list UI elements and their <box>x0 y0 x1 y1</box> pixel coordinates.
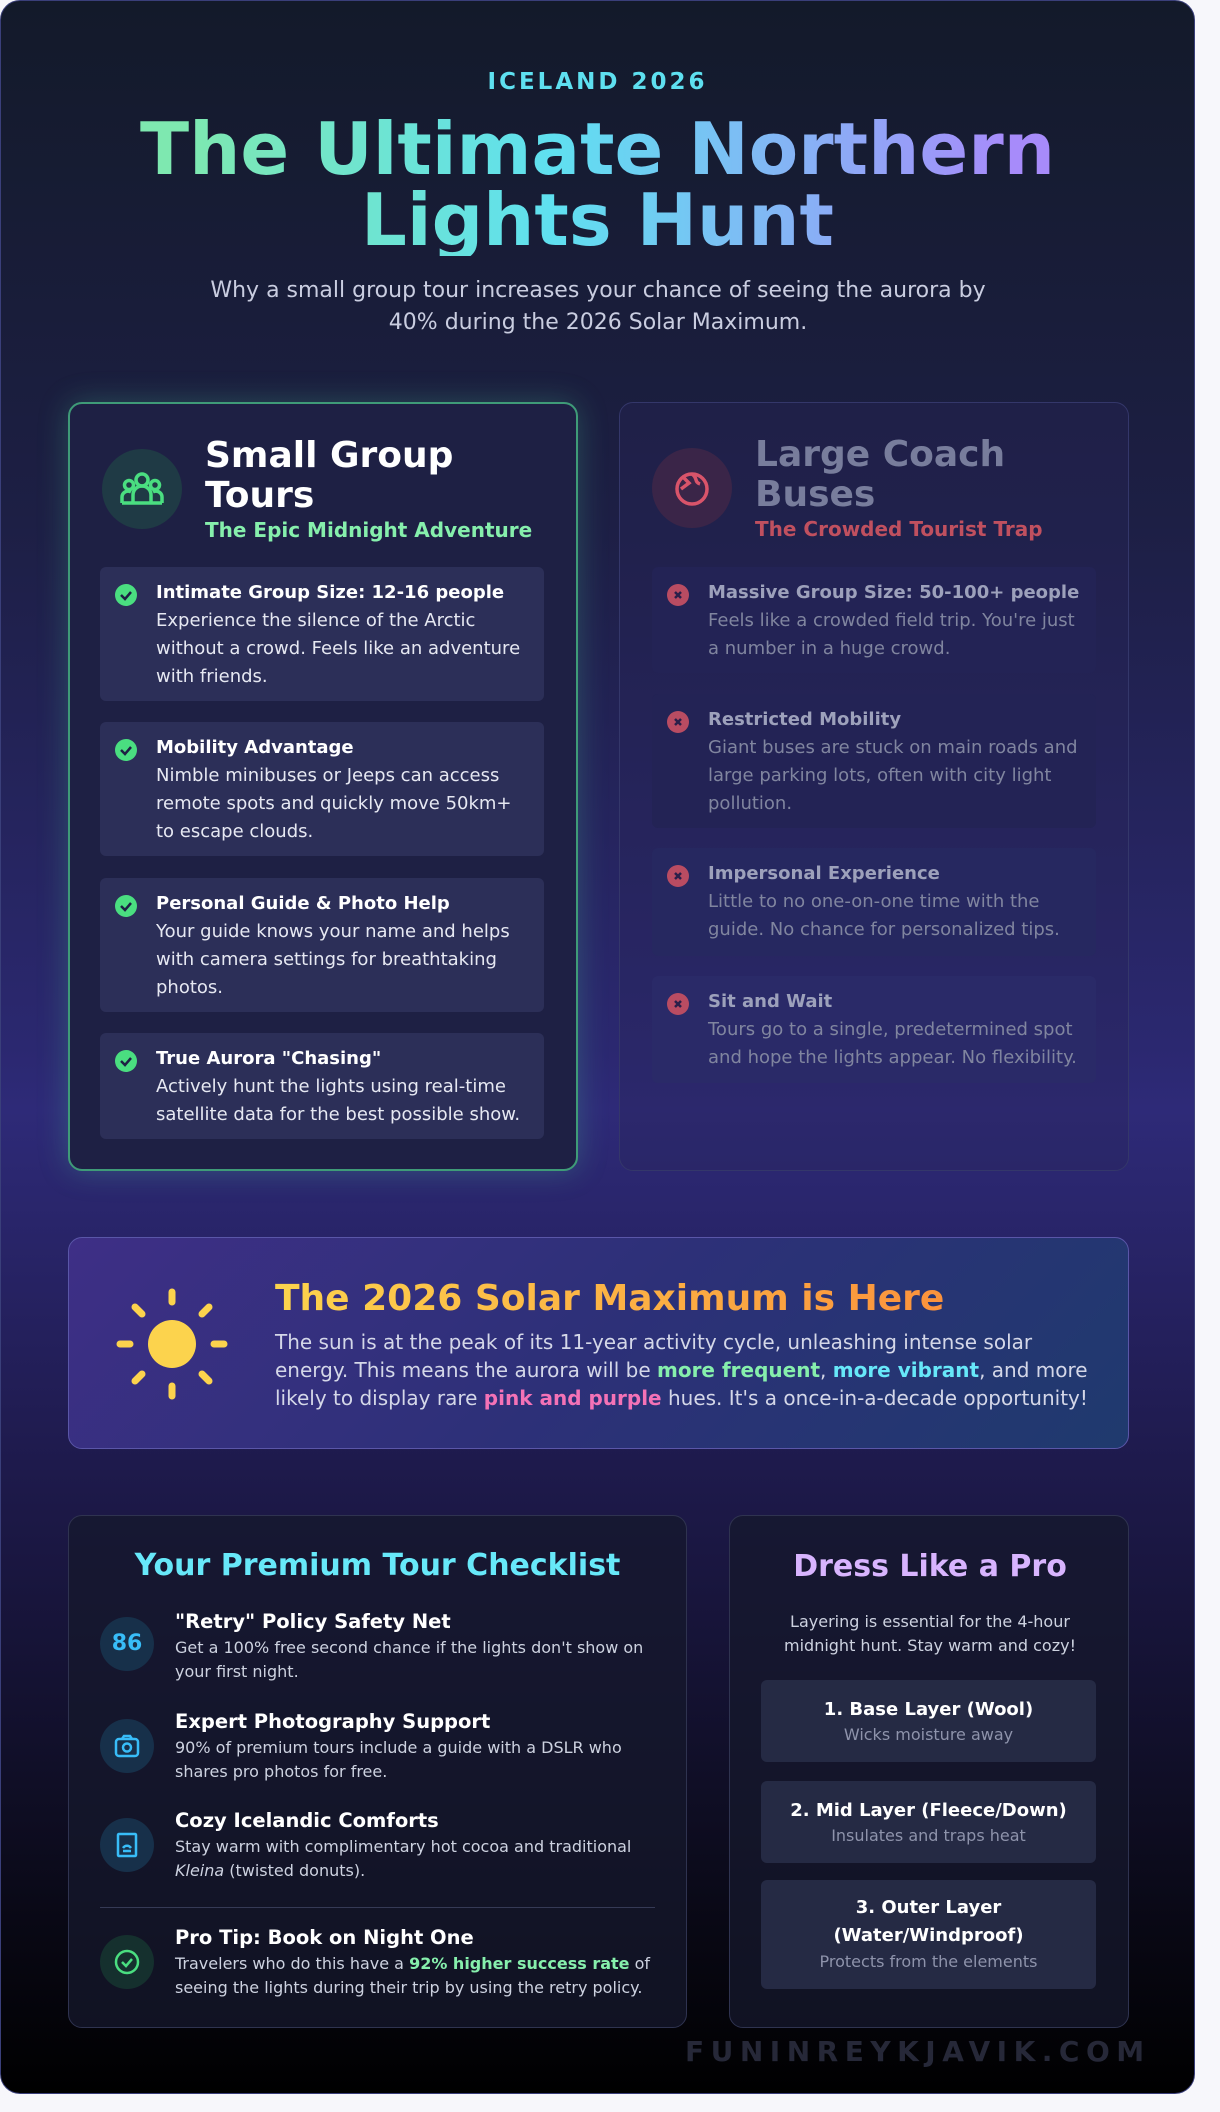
bad item 2: Restricted Mobility <box>708 709 901 730</box>
item 2 <box>100 722 544 856</box>
item 4: Actively hunt the lights using real-time satellite data for the best possible show. <box>156 1076 520 1125</box>
item 2: Mobility Advantage <box>156 737 354 758</box>
icon: group <box>102 449 182 529</box>
eyebrow: ICELAND 2026 <box>488 69 707 95</box>
icon: sun <box>116 1288 228 1400</box>
bad item 1: Massive Group Size: 50-100+ people <box>708 582 1079 603</box>
item 3 <box>100 878 544 1012</box>
layer 3 <box>761 1880 1096 1989</box>
item 1: Intimate Group Size: 12-16 people <box>156 582 504 603</box>
panel: checklist <box>68 1515 687 2028</box>
item 3: Personal Guide & Photo Help <box>156 893 450 914</box>
layer 3: Protects from the elements <box>820 1952 1037 1971</box>
item 4: True Aurora "Chasing" <box>156 1048 381 1069</box>
heading <box>755 434 1005 515</box>
bad item 3: Impersonal Experience <box>708 863 940 884</box>
bad item 1: Feels like a crowded field trip. You're just a number in a huge crowd. <box>708 610 1075 659</box>
layer 2 <box>761 1781 1096 1863</box>
title <box>140 107 1055 262</box>
heading: Small Group <box>205 435 453 476</box>
bad item 2: Giant buses are stuck on main roads and large parking lots, often with city light pollution. <box>708 737 1078 814</box>
panel: large coach buses <box>619 402 1129 1171</box>
layer 1: 1. Base Layer (Wool) <box>824 1699 1033 1720</box>
pro tip <box>100 1926 650 1997</box>
bad item 4: Sit and Wait <box>708 991 832 1012</box>
checklist content: Pro Tip: Book on Night One <box>175 1926 474 1949</box>
layer 2: 2. Mid Layer (Fleece/Down) <box>790 1800 1067 1821</box>
footer brand: FUNINREYKJAVIK.COM <box>685 2035 1151 2068</box>
bad item 4: Tours go to a single, predetermined spot and hope the lights appear. No flexibility. <box>708 1019 1077 1068</box>
bad item 4 <box>652 976 1096 1083</box>
layer 3: 3. Outer Layer <box>856 1897 1001 1918</box>
heading: Tours <box>205 475 314 516</box>
heading: Large Coach <box>755 434 1005 475</box>
dress intro: Layering is essential for the 4-hour midnight hunt. Stay warm and cozy! <box>784 1612 1076 1655</box>
item 3: Your guide knows your name and helps with camera settings for breathtaking photos. <box>156 921 510 998</box>
layer 1: Wicks moisture away <box>844 1725 1013 1744</box>
checklist content: "Retry" Policy Safety Net <box>175 1610 451 1633</box>
bad item 3: Little to no one-on-one time with the guide. No chance for personalized tips. <box>708 891 1060 940</box>
checklist item: comforts <box>100 1809 631 1880</box>
bad item 1 <box>652 567 1096 673</box>
bad item 3 <box>652 848 1096 956</box>
icon: bus <box>652 448 732 528</box>
subheading: The Crowded Tourist Trap <box>755 517 1043 541</box>
heading: Buses <box>755 474 875 515</box>
checklist content: Stay warm with complimentary hot cocoa and traditional Kleina (twisted donuts). <box>175 1837 631 1880</box>
panel: solar maximum <box>68 1237 1129 1449</box>
layer 3: (Water/Windproof) <box>833 1925 1024 1946</box>
heading: The 2026 Solar Maximum is Here <box>275 1278 944 1319</box>
checklist item: photography <box>100 1710 622 1781</box>
checklist heading: Your Premium Tour Checklist <box>135 1548 620 1583</box>
checklist content: 90% of premium tours include a guide with a DSLR who shares pro photos for free. <box>175 1738 622 1781</box>
checklist content: 86 <box>112 1631 142 1656</box>
title: The Ultimate Northern <box>140 107 1055 191</box>
body: The sun is at the peak of its 11-year activity cycle, unleashing intense solar energy. This means the aurora will be more frequent, more vibrant, and more likely to display rare pink and purple hues. It's a once-in-a-decade opportunity! <box>275 1330 1088 1410</box>
layer 1 <box>761 1680 1096 1762</box>
item 2: Nimble minibuses or Jeeps can access remote spots and quickly move 50km+ to escape clouds. <box>156 765 512 842</box>
layer 2: Insulates and traps heat <box>831 1826 1026 1845</box>
item 1 <box>100 567 544 701</box>
checklist content: Expert Photography Support <box>175 1710 490 1733</box>
subtitle: Why a small group tour increases your chance of seeing the aurora by 40% during the 2026 Solar Maximum. <box>210 278 986 335</box>
checklist item: retry <box>100 1610 643 1681</box>
panel: small group tours <box>68 402 578 1171</box>
title: Lights Hunt <box>361 178 834 262</box>
heading <box>205 435 453 516</box>
checklist content: Travelers who do this have a 92% higher success rate of seeing the lights during their trip by using the retry policy. <box>175 1954 650 1997</box>
dress heading: Dress Like a Pro <box>793 1549 1067 1584</box>
item 4 <box>100 1033 544 1139</box>
checklist content: Get a 100% free second chance if the lights don't show on your first night. <box>175 1638 643 1681</box>
panel: dress like a pro <box>729 1515 1129 2028</box>
subheading: The Epic Midnight Adventure <box>205 518 532 542</box>
bad item 2 <box>652 694 1096 828</box>
item 1: Experience the silence of the Arctic without a crowd. Feels like an adventure with friends. <box>156 610 520 687</box>
checklist content: Cozy Icelandic Comforts <box>175 1809 439 1832</box>
